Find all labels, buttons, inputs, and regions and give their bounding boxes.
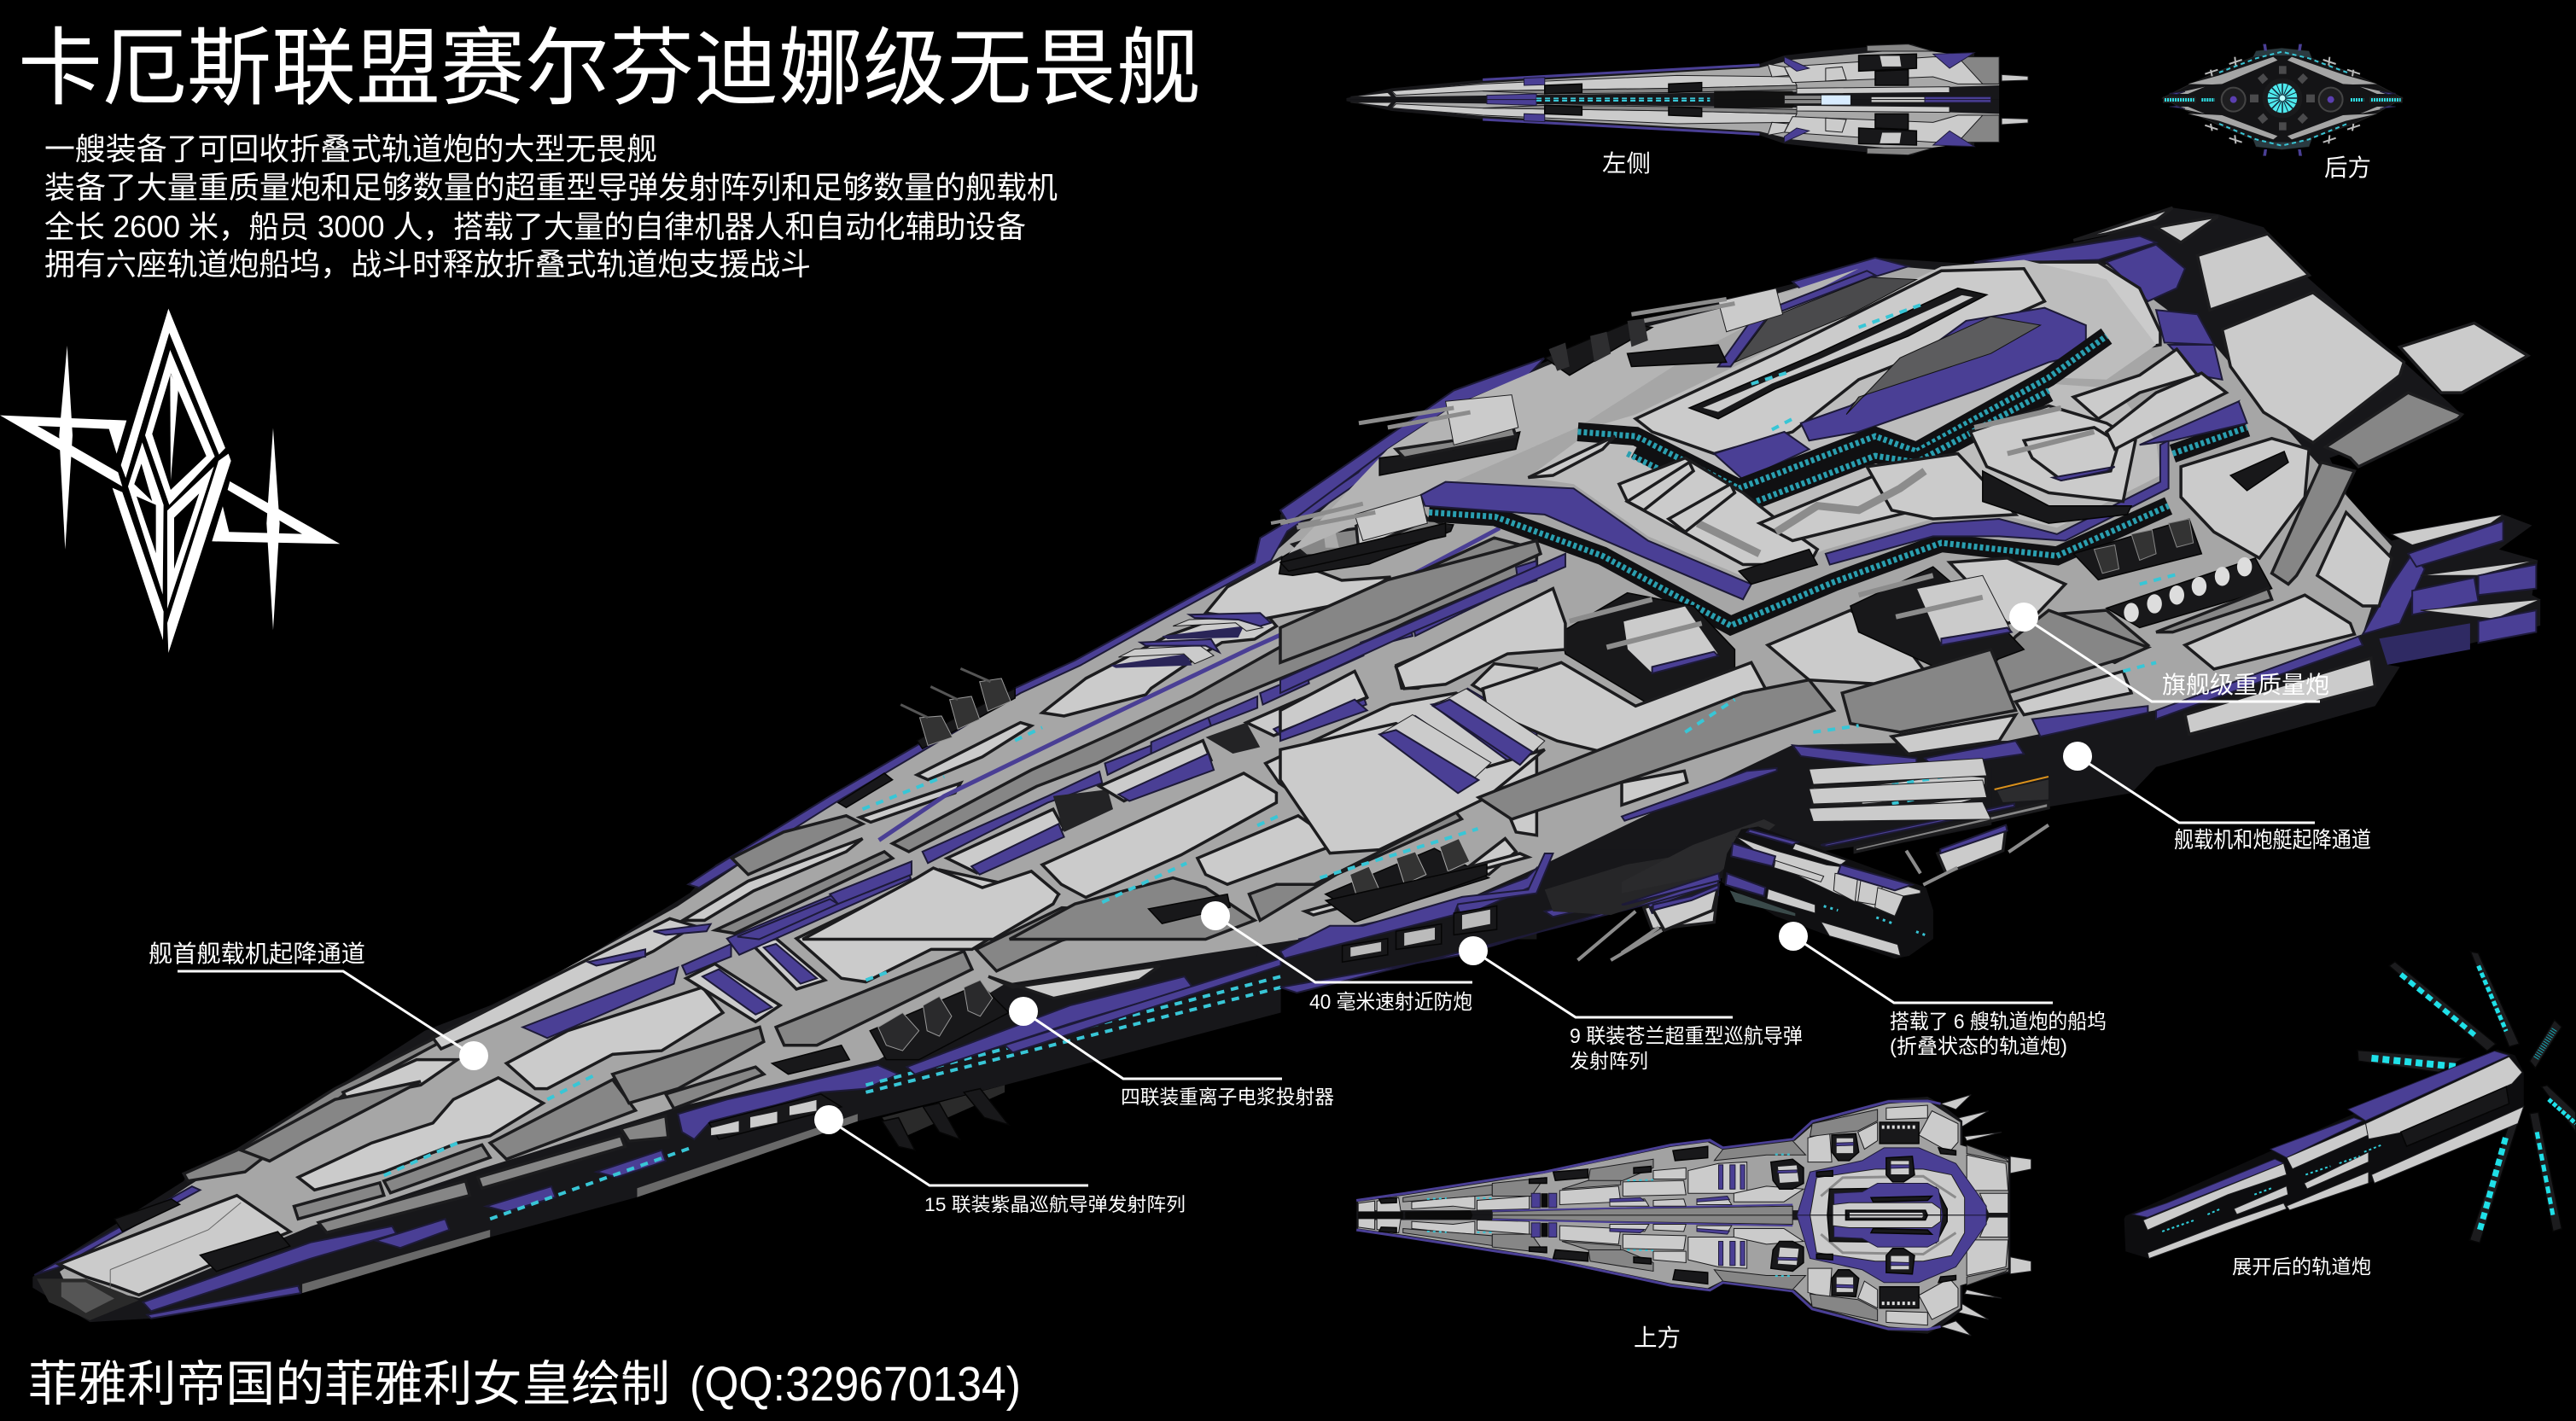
callout: 15-cell cruise missile array — [814, 1105, 1186, 1215]
top view of ship, labelled 上方 — [1356, 1095, 2031, 1336]
reactor core — [2263, 79, 2302, 118]
title: 卡厄斯联盟赛尔芬迪娜级无畏舰 — [18, 20, 1201, 115]
turret: forward triple cannon — [870, 980, 1009, 1060]
callout: 9-cell heavy cruise missile array — [1459, 936, 1803, 1072]
mirrored lower half of plan view — [1356, 1215, 2031, 1336]
folded orbital gun dock — [1622, 768, 2049, 958]
turret: starboard heavy gun — [1850, 567, 2024, 676]
cyan lit terraces — [1429, 336, 2247, 626]
turrets: upper triple point defence — [900, 668, 1015, 748]
forward hull (bow section) — [34, 865, 1281, 1320]
drive gears — [2222, 88, 2343, 112]
deck backing plate — [60, 265, 2392, 1298]
turret: port heavy gun — [1561, 593, 1734, 706]
upper half of plan view — [1356, 1095, 2031, 1215]
gun barrel — [2124, 1050, 2524, 1259]
callout: fighter and gunboat launch channel — [2063, 742, 2371, 853]
aft point-defence and vent block — [2073, 519, 2272, 628]
callout: quad plasma projector: 四联装重离子电浆投射器 — [1121, 1086, 1334, 1108]
aft section: superstructure, stern plates and fins — [1280, 207, 2540, 853]
callout: 40mm close-in gun — [1201, 901, 1472, 1014]
small turrets — [2205, 57, 2360, 143]
deployed orbital gun — [2124, 952, 2576, 1259]
callout: orbital gun dock: 搭载了 6 艘轨道炮的船坞 — [1890, 1010, 2107, 1034]
upper half of side view — [1346, 44, 2028, 100]
left side view of ship, labelled 左侧 — [1346, 44, 2028, 155]
callout: quad plasma projector — [1009, 997, 1334, 1108]
author credit — [28, 1357, 1021, 1412]
callout: 9-cell heavy cruise missile array: 9 联装苍兰超重型巡航导弹 — [1570, 1025, 1803, 1048]
gun vanes — [2357, 952, 2576, 1243]
deck vents — [1110, 613, 1271, 668]
description text block — [44, 131, 1058, 282]
plan view turrets — [1771, 1133, 1915, 1189]
description text block: 装备了大量重质量炮和足够数量的超重型导弹发射阵列和足够数量的舰载机 — [44, 170, 1058, 205]
turret: triple close-in cluster — [1326, 839, 1489, 917]
hull silhouette — [32, 207, 2540, 1322]
view label: left side: 左侧 — [1602, 150, 1651, 177]
view label: rear: 后方 — [2324, 154, 2371, 181]
surrounding blocks — [2250, 66, 2315, 131]
turret: superstructure heavy gun — [1970, 405, 2136, 523]
emblem — [0, 309, 340, 653]
callout: flagship mass cannon — [2009, 603, 2329, 702]
callout: fighter and gunboat launch channel: 舰载机和炮艇起降通道 — [2174, 827, 2371, 853]
rear view of ship, labelled 后方 — [2162, 44, 2403, 156]
author credit: (QQ:329670134) — [690, 1357, 1021, 1412]
callout: 15-cell cruise missile array: 15 联装紫晶巡航导弹发射阵列 — [924, 1194, 1186, 1215]
lower point-defence pods — [883, 1089, 1009, 1150]
main ship: dreadnought perspective render — [32, 207, 2540, 1322]
upper-deck turrets along port side — [1280, 288, 1783, 571]
mirrored lower half of side view — [1346, 100, 2028, 155]
view label: top: 上方 — [1634, 1325, 1681, 1351]
author credit: 菲雅利帝国的菲雅利女皇绘制 — [28, 1357, 670, 1412]
docked gun barrel — [1722, 826, 1933, 958]
superstructure backing decks — [1289, 260, 2160, 579]
callout: 40mm close-in gun: 40 毫米速射近防炮 — [1309, 991, 1472, 1014]
callout: bow fighter launch channel — [149, 941, 488, 1070]
missile launcher boxes — [1343, 906, 1497, 962]
callout: orbital gun dock: (折叠状态的轨道炮) — [1890, 1035, 2067, 1058]
stern fins — [2379, 515, 2540, 665]
turret: upper heavy gun — [1271, 495, 1454, 575]
lower hull with missile arrays — [1280, 853, 1718, 993]
view label: deployed orbital gun: 展开后的轨道炮 — [2232, 1255, 2371, 1278]
callout: 9-cell heavy cruise missile array: 发射阵列 — [1570, 1050, 1648, 1072]
description text block: 全长 2600 米，船员 3000 人，搭载了大量的自律机器人和自动化辅助设备 — [44, 209, 1026, 244]
superstructure top deck — [1635, 269, 2086, 480]
side light bars — [2163, 96, 2403, 103]
hull edge bands — [2172, 57, 2392, 139]
description text block: 一艘装备了可回收折叠式轨道炮的大型无畏舰 — [44, 131, 657, 166]
callout: flagship mass cannon: 旗舰级重质量炮 — [2162, 672, 2329, 698]
description text block: 拥有六座轨道炮船坞，战斗时释放折叠式轨道炮支援战斗 — [44, 247, 811, 282]
mid hull: gray strip, purple bars, vents — [683, 443, 1536, 940]
engine glow — [1821, 96, 1850, 105]
callout: bow fighter launch channel: 舰首舰载机起降通道 — [149, 941, 365, 967]
callout: orbital gun dock — [1779, 922, 2107, 1058]
